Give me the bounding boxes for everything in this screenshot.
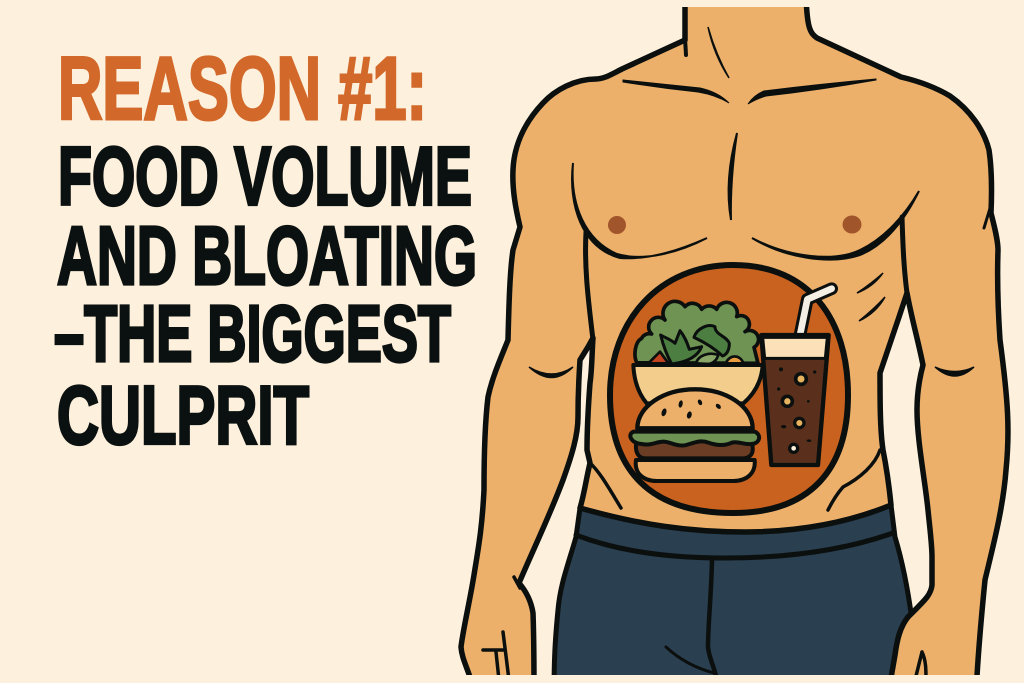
left wrist crease: [514, 577, 520, 588]
bowl: [633, 365, 763, 403]
lower rib mark: [859, 297, 885, 321]
waistband lower edge: [576, 533, 893, 558]
burger lettuce: [630, 432, 759, 446]
muscle definition lines: [529, 27, 974, 378]
right hip crease: [828, 450, 880, 510]
drink straw: [800, 289, 832, 335]
soda foam: [763, 337, 827, 358]
burger bottom bun: [636, 460, 755, 481]
soda glass: [761, 335, 829, 465]
burger top bun: [637, 389, 753, 428]
heading line: the biggest: –THE BIGGEST: [54, 289, 451, 378]
neck line: [708, 27, 729, 78]
sesame seeds: [661, 399, 722, 419]
left pec: [572, 163, 707, 258]
salad leaves: [635, 301, 759, 363]
right shoulder notch: [982, 208, 989, 230]
shorts details: [576, 533, 893, 680]
left elbow crease: [529, 367, 573, 378]
right torso side: [902, 217, 907, 293]
salad dark leaf right: [694, 326, 729, 356]
food group: [630, 289, 832, 481]
right pec: [752, 191, 919, 260]
heading line: and bloating: AND BLOATING: [57, 209, 477, 302]
salad carrot: [726, 356, 743, 363]
chest and hip lines: [586, 38, 991, 510]
heading line: food volume: FOOD VOLUME: [58, 130, 472, 222]
salad light leaf: [696, 354, 718, 364]
sternum: [729, 133, 737, 220]
illustration: torso figure: [461, 0, 1008, 683]
salad dark leaf left: [661, 331, 702, 364]
left fingers: [483, 632, 509, 680]
soda bubbles: [782, 374, 806, 452]
right fingers: [915, 652, 926, 680]
burger patty: [636, 440, 753, 458]
body silhouette: [461, 0, 1008, 683]
fly seam: [708, 560, 717, 680]
shorts: [554, 505, 912, 683]
soda specks: [777, 367, 816, 442]
left collarbone: [623, 80, 729, 103]
left hip crease: [590, 463, 621, 508]
hand finger lines: [483, 577, 926, 680]
right nipple: [842, 216, 862, 234]
rib marks: [857, 273, 883, 293]
left torso side: [586, 232, 593, 340]
salad tomato: [648, 352, 668, 363]
neck base stub: [685, 38, 686, 55]
heading: reason number: REASON #1:: [58, 38, 427, 138]
left nipple: [608, 216, 626, 234]
fold crease: [666, 647, 714, 673]
heading line: culprit: CULPRIT: [57, 368, 309, 462]
right collarbone: [748, 79, 876, 104]
stomach circle: [610, 265, 848, 513]
title block: [54, 38, 477, 462]
right elbow crease: [935, 367, 974, 376]
